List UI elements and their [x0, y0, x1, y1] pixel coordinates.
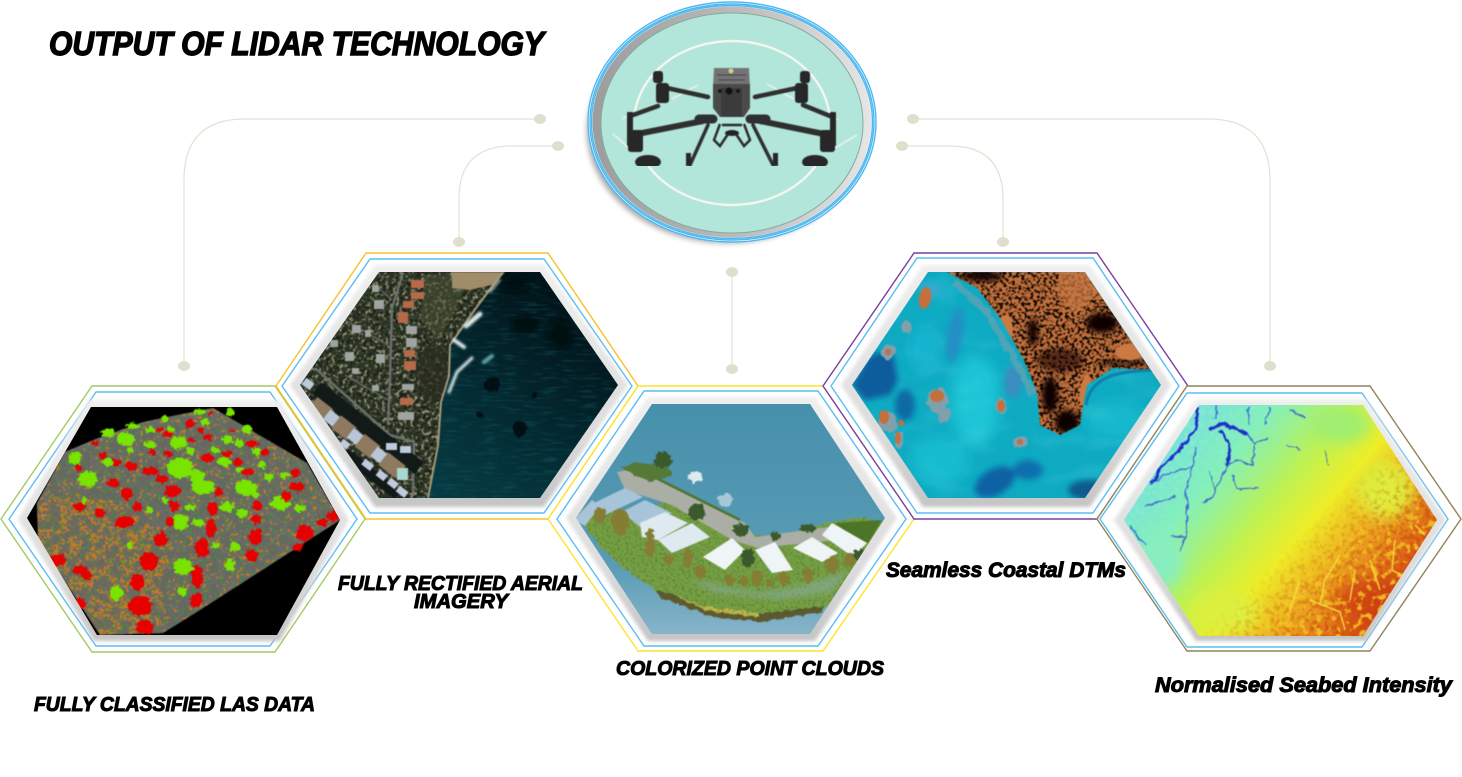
hex shadow frame — [18, 400, 349, 641]
chart: classified point cloud — [20, 400, 350, 640]
hex outline orange — [276, 253, 638, 519]
photo: colorized point cloud — [570, 400, 890, 638]
hex outline blue — [831, 258, 1179, 513]
ground band — [577, 500, 883, 622]
coastal shelf band — [955, 282, 1033, 395]
light veins — [1290, 525, 1425, 630]
landing ring — [634, 41, 830, 205]
label: fully classified LAS data: FULLY CLASSIFIED LAS DATA — [34, 693, 315, 716]
hex outline blue — [282, 259, 632, 513]
hex shadow frame — [566, 397, 897, 641]
label: colorized point clouds: COLORIZED POINT CLOUDS — [616, 657, 884, 680]
hex outline yellow — [548, 386, 914, 651]
connector: seabed intensity — [907, 114, 1276, 371]
label: normalised seabed intensity: Normalised Seabed Intensity — [1155, 674, 1453, 697]
panel: fully classified LAS data hexagon — [1, 386, 365, 652]
hex shadow frame — [841, 265, 1171, 507]
label: fully rectified aerial imagery — [338, 572, 583, 613]
road surface — [617, 468, 838, 548]
deep water — [852, 282, 1112, 504]
badge rings — [588, 2, 876, 242]
panel: seamless coastal DTMs hexagon — [823, 253, 1188, 519]
soft cyan shoals — [909, 326, 1145, 484]
grey bezel — [592, 6, 872, 238]
green tree clusters — [69, 408, 306, 601]
shaded courtyard — [690, 570, 850, 600]
orange roofs — [398, 280, 424, 405]
photo: aerial coast — [292, 270, 625, 502]
panel: normalised seabed intensity hexagon — [1097, 386, 1461, 651]
islands — [879, 286, 1023, 445]
hex outline purple — [823, 253, 1188, 519]
noise layers — [1204, 455, 1436, 636]
regional tints — [1138, 407, 1413, 632]
label: fully rectified aerial imagery: FULLY RECTIFIED AERIAL — [338, 572, 583, 595]
connector: point clouds — [726, 267, 738, 374]
island surrounds — [879, 321, 1027, 449]
connector: LAS data — [178, 114, 546, 371]
drone backdrop — [622, 114, 842, 166]
map: seabed intensity — [1120, 400, 1440, 640]
panel: drone badge — [587, 2, 876, 243]
badge shadow — [587, 19, 867, 243]
hex outline brown — [1097, 386, 1461, 651]
blue drainage channels — [1152, 408, 1248, 483]
label: seamless coastal DTMs: Seamless Coastal DTMs — [886, 559, 1126, 582]
hex shadow frame — [1114, 399, 1446, 641]
hex outline green — [1, 386, 365, 652]
label: fully rectified aerial imagery: IMAGERY — [414, 590, 510, 613]
hex outline blue — [9, 392, 357, 646]
coastline rim — [1086, 370, 1159, 405]
kelp patches — [476, 274, 573, 436]
panel: colorized point clouds hexagon — [548, 386, 914, 651]
title: OUTPUT OF LIDAR TECHNOLOGY — [49, 25, 547, 62]
mint landing pad — [601, 13, 863, 233]
land — [300, 272, 505, 498]
hex outline blue — [1100, 393, 1448, 647]
surf — [449, 280, 500, 392]
hex outline blue — [557, 391, 906, 646]
light roofs — [330, 285, 417, 420]
connector: coastal DTMs — [896, 141, 1009, 247]
map: coastal DTM — [848, 270, 1165, 504]
connector: aerial imagery — [453, 141, 564, 247]
red building clusters — [48, 411, 339, 634]
scattered white points — [688, 472, 732, 507]
land — [947, 272, 1161, 435]
icon: drone — [613, 68, 857, 169]
hex shadow frame — [290, 265, 628, 507]
dark palms — [654, 452, 866, 567]
trees — [594, 507, 856, 588]
condominium block — [312, 382, 424, 498]
panel: fully rectified aerial imagery hexagon — [276, 253, 638, 519]
beach — [452, 272, 505, 290]
roofs — [590, 488, 672, 527]
roads — [315, 273, 414, 495]
